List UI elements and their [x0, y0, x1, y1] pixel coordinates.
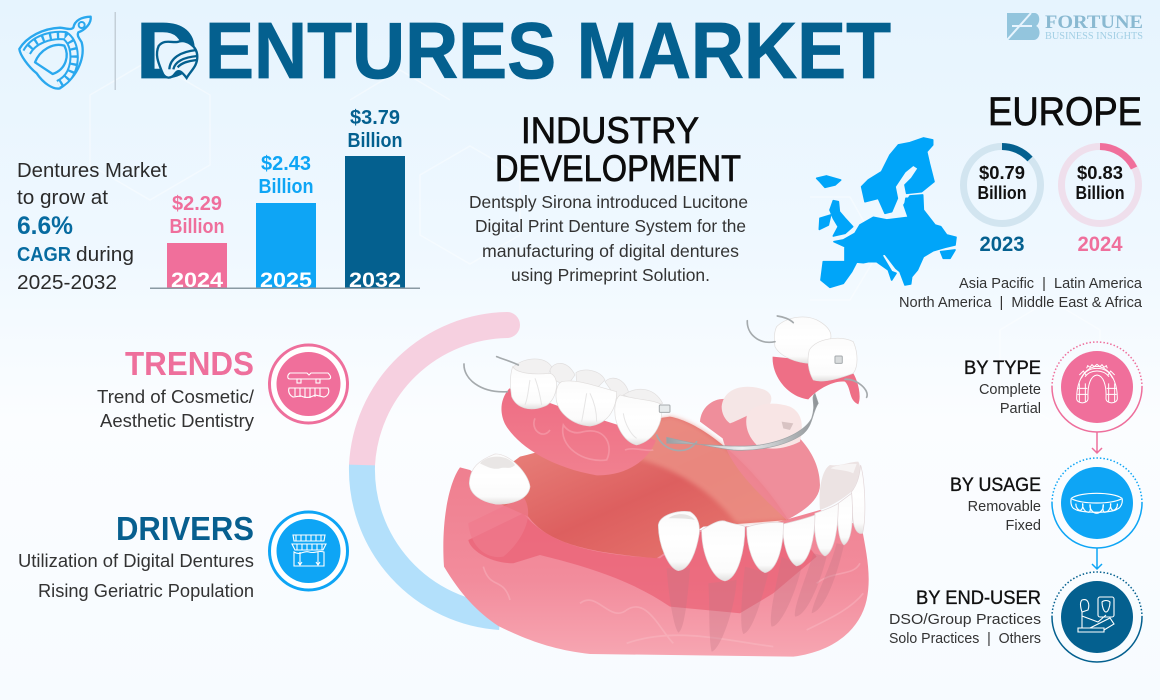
- ring: Europe 2023 value: Billion: [978, 183, 1026, 203]
- icon: drivers denture: [270, 512, 348, 590]
- ring: Europe 2023 value: [964, 146, 1040, 256]
- bar: 2025: 2025: [260, 269, 312, 292]
- arc: pink and blue semicircle: [362, 325, 507, 617]
- top right partial teeth: [774, 317, 857, 381]
- icon: fixed denture: [1052, 458, 1142, 548]
- text block: CAGR summary: CAGR: [17, 243, 71, 266]
- panel: by end-user: [889, 572, 1142, 662]
- panel: by end-user: BY END-USER: [916, 587, 1041, 609]
- heading: trends: TRENDS: [125, 345, 254, 382]
- panel: by usage: Fixed: [1006, 518, 1041, 534]
- text block: CAGR summary: 2025-2032: [17, 271, 117, 294]
- bar: 2024: 2024: [171, 269, 223, 292]
- upper left partial gum: [501, 388, 656, 475]
- back left molar root: [468, 497, 528, 557]
- connector bar: [667, 393, 818, 450]
- bar: 2025: [256, 153, 316, 292]
- deep gum band: [468, 513, 817, 613]
- bar: 2025: Billion: [258, 176, 314, 198]
- panel: by usage: Removable: [968, 499, 1041, 515]
- text block: other regions: [899, 276, 1143, 311]
- text block: drivers: [18, 550, 254, 601]
- heading: Europe: EUROPE: [988, 90, 1142, 134]
- heading: industry development: DEVELOPMENT: [495, 148, 741, 189]
- divider line: [114, 12, 116, 90]
- back left molar: [469, 454, 530, 504]
- bar: 2024: Billion: [170, 216, 224, 238]
- logo: Fortune Business Insights: [1007, 12, 1143, 42]
- panel: by end-user: DSO/Group Practices: [889, 612, 1041, 628]
- bar: 2024: [167, 193, 227, 292]
- text block: industry development: [469, 192, 748, 285]
- ring: Europe 2024 value: 2024: [1078, 233, 1123, 256]
- map: Europe: [817, 138, 956, 287]
- upper left partial teeth: [513, 359, 663, 407]
- title: D: [136, 6, 198, 95]
- text block: industry development: Digital Print Denture System for the: [475, 216, 746, 236]
- ring: Europe 2024 value: Billion: [1076, 183, 1124, 203]
- right back teeth: [722, 387, 802, 449]
- panel: by usage: BY USAGE: [950, 474, 1041, 496]
- icon: complete denture: [1052, 342, 1142, 432]
- heading: industry development: [495, 110, 741, 189]
- text block: trends: Trend of Cosmetic/: [97, 386, 255, 407]
- icon: impression tray logo: [19, 17, 91, 89]
- lower front teeth: [658, 462, 865, 581]
- bar chart: market size: [150, 107, 420, 292]
- floor of the mouth: [473, 417, 788, 558]
- partial gum swirls: [534, 418, 653, 460]
- bar: 2032: $3.79: [350, 107, 400, 129]
- bar: 2025: $2.43: [261, 153, 311, 175]
- panel: by type: [964, 342, 1142, 453]
- panel: trends: [97, 345, 348, 431]
- icon: trends denture: [270, 345, 348, 423]
- top right partial gum: [773, 357, 860, 404]
- icon: tooth in title letter: [157, 41, 197, 78]
- text block: CAGR summary: to grow at: [17, 186, 108, 209]
- top right clasps: [747, 316, 867, 397]
- text block: trends: Aesthetic Dentistry: [100, 410, 255, 431]
- clasps on left: [464, 357, 670, 412]
- panel: by type: Partial: [1000, 401, 1041, 417]
- text block: drivers: Rising Geriatric Population: [38, 580, 254, 601]
- text block: CAGR summary: [17, 159, 167, 294]
- text block: CAGR summary: Dentures Market: [17, 159, 167, 182]
- illustration: partial denture on lower jaw: [443, 316, 869, 657]
- heading: industry development: INDUSTRY: [521, 110, 699, 151]
- bar: 2032: 2032: [349, 269, 401, 292]
- ring: Europe 2024 value: [1062, 146, 1138, 256]
- roots: [667, 543, 844, 652]
- text block: industry development: using Primeprint Solution.: [511, 265, 710, 285]
- bar: 2032: Billion: [348, 130, 402, 152]
- upper left partial denture: [464, 357, 670, 475]
- ring: Europe 2023 value: 2023: [980, 233, 1024, 256]
- right back gum: [700, 399, 820, 520]
- lower gum base: [443, 467, 869, 657]
- panel: by type: Complete: [979, 382, 1041, 398]
- panel: by usage: [950, 458, 1142, 569]
- text block: other regions: Asia Pacific | Latin America: [959, 276, 1143, 292]
- gum swirl highlights: [483, 563, 863, 647]
- icon: dentist: [1052, 572, 1142, 662]
- logo: Fortune Business Insights: FORTUNE: [1045, 12, 1143, 33]
- panel: drivers: [18, 510, 348, 601]
- ring: Europe 2023 value: $0.79: [979, 163, 1025, 183]
- heading: drivers: DRIVERS: [116, 510, 254, 547]
- bar: 2032: [345, 107, 405, 292]
- logo: Fortune Business Insights: BUSINESS INSIGHTS: [1045, 31, 1143, 42]
- ring: Europe 2024 value: $0.83: [1077, 163, 1123, 183]
- text block: industry development: Dentsply Sirona introduced Lucitone: [469, 192, 748, 212]
- text block: CAGR summary: during: [76, 243, 134, 266]
- text block: drivers: Utilization of Digital Dentures: [18, 550, 254, 571]
- text block: other regions: North America | Middle East & Africa: [899, 295, 1143, 311]
- text block: industry development: manufacturing of digital dentures: [482, 241, 739, 261]
- panel: by end-user: Solo Practices | Others: [889, 631, 1041, 647]
- text block: CAGR summary: 6.6%: [17, 212, 73, 240]
- connector clasp: [657, 435, 697, 451]
- text block: trends: [97, 386, 255, 431]
- panel: by type: BY TYPE: [964, 357, 1041, 379]
- arrow: type to usage: [1092, 432, 1102, 453]
- bar: 2024: $2.29: [172, 193, 222, 215]
- arrow: usage to end-user: [1092, 548, 1102, 569]
- title: ENTURES MARKET: [205, 6, 891, 95]
